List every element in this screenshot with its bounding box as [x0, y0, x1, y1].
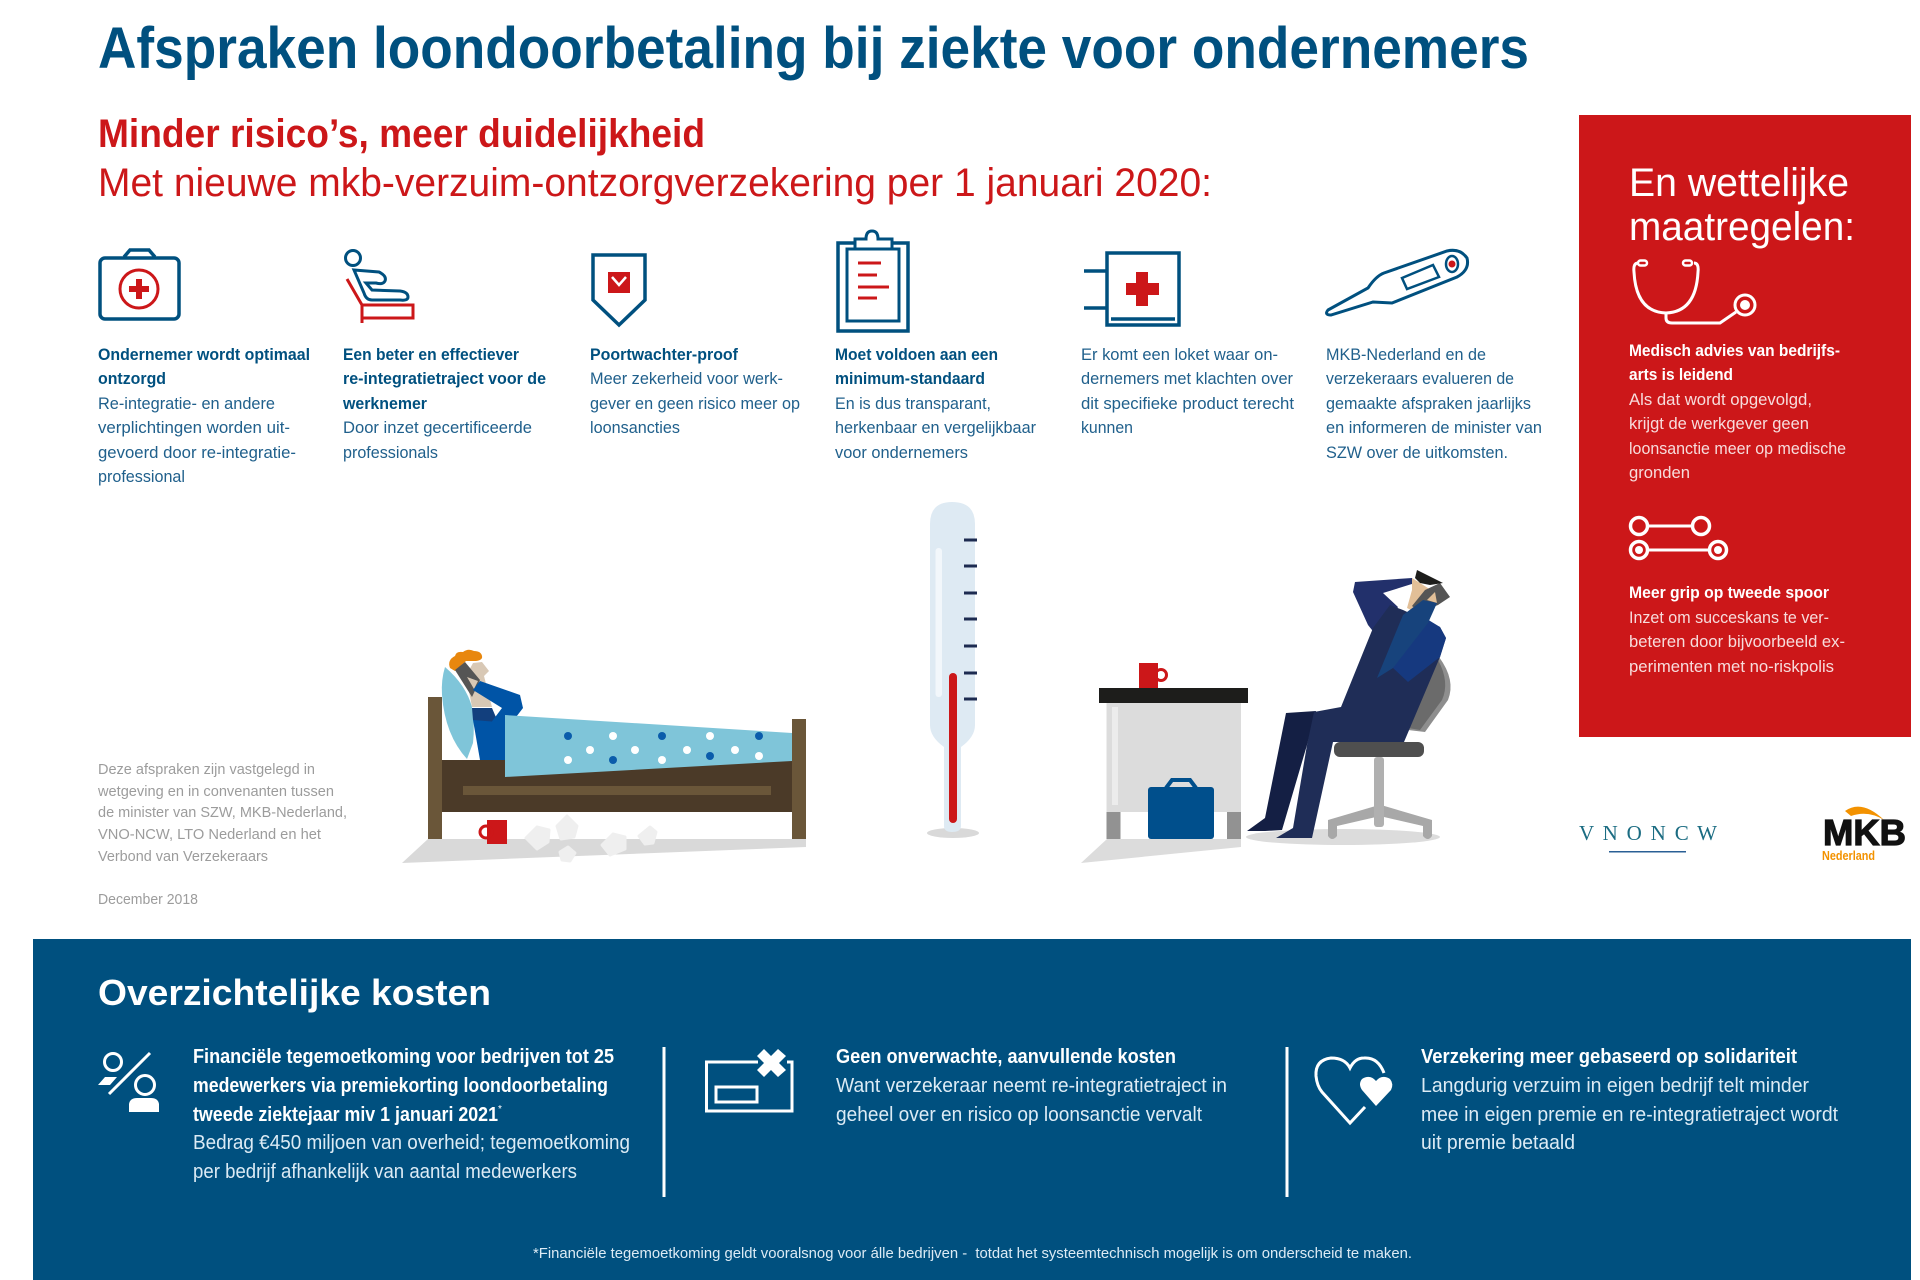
footnote: *Financiële tegemoetkoming geldt vooralsnog voor álle bedrijven - totdat het systeemtechnisch mogelijk is om onderscheid te maken. [533, 1245, 1412, 1262]
measure 2 text: Meer grip op tweede spoor [1629, 583, 1829, 602]
subtitle: Met nieuwe mkb-verzuim-ontzorgverzekering per 1 januari 2020: [98, 161, 1212, 205]
cost 2 text [836, 1046, 1227, 1126]
cost 2 text: Want verzekeraar neemt re-integratietraject in [836, 1075, 1227, 1097]
measure 2 text: beteren door bijvoorbeeld ex- [1629, 632, 1845, 651]
logo: MKB Nederland: Nederland [1822, 848, 1875, 863]
cost 1 text: Financiële tegemoetkoming voor bedrijven tot 25 [193, 1046, 614, 1068]
column 3 text: Poortwachter-proof [590, 345, 738, 364]
column 5 text: dernemers met klachten over [1081, 369, 1293, 388]
illustration: stressed man on chair [1246, 570, 1451, 845]
column 1 text: Ondernemer wordt optimaal [98, 345, 310, 364]
measure 2 text: perimenten met no-riskpolis [1629, 657, 1834, 676]
icon: stethoscope [1634, 260, 1755, 323]
column 5 text: dit specifieke product terecht [1081, 394, 1294, 413]
column 6 text: MKB-Nederland en de [1326, 345, 1486, 364]
column 3 text: loonsancties [590, 418, 680, 437]
icon: first aid case [100, 250, 179, 319]
cost 2 text: geheel over en risico op loonsanctie vervalt [836, 1104, 1202, 1126]
subtitle: Minder risico’s, meer duidelijkheid [98, 112, 705, 156]
column 2 text [342, 345, 546, 462]
column 1 text: ontzorgd [98, 369, 166, 388]
measure 2 text: Inzet om succeskans te ver- [1629, 608, 1829, 627]
column 2 text: re-integratietraject voor de [343, 369, 546, 388]
panel heading [1629, 161, 1855, 249]
column 6 text: en informeren de minister van [1326, 418, 1542, 437]
subtitle [98, 112, 1212, 205]
illustration: desk [1081, 663, 1248, 863]
column 5 text [1081, 345, 1294, 437]
column 6 text: verzekeraars evalueren de [1326, 369, 1514, 388]
column 4 text: herkenbaar en vergelijkbaar [835, 418, 1036, 437]
column 1 text: Re-integratie- en andere [98, 394, 275, 413]
column 6 text: gemaakte afspraken jaarlijks [1326, 394, 1531, 413]
footnote: source note: December 2018 [98, 891, 198, 908]
column 1 text [98, 345, 310, 486]
title: Afspraken loondoorbetaling bij ziekte voor ondernemers [98, 16, 1529, 81]
icon: percent with person [98, 1053, 159, 1112]
cost 1 text: medewerkers via premiekorting loondoorbetaling [193, 1075, 608, 1097]
logo: MKB Nederland: MKB [1823, 812, 1906, 853]
column 4 text [835, 345, 1036, 462]
footnote: source note: Deze afspraken zijn vastgelegd in [98, 761, 315, 778]
cost 3 text: Verzekering meer gebaseerd op solidariteit [1421, 1046, 1797, 1068]
measure 1 text: loonsanctie meer op medische [1629, 439, 1846, 458]
column 2 text: werknemer [342, 394, 427, 413]
measure 1 text: Als dat wordt opgevolgd, [1629, 390, 1812, 409]
panel heading: maatregelen: [1629, 205, 1855, 249]
cost 1 text: per bedrijf afhankelijk van aantal medewerkers [193, 1161, 577, 1183]
icon: shield [593, 255, 645, 325]
column 2 text: professionals [343, 443, 438, 462]
measure 1 text: arts is leidend [1629, 365, 1733, 384]
icon: person in chair [346, 250, 413, 323]
column 2 text: Een beter en effectiever [343, 345, 519, 364]
cost 3 text: Langdurig verzuim in eigen bedrijf telt minder [1421, 1075, 1809, 1097]
panel: costs [33, 939, 1911, 1280]
cost 3 text: uit premie betaald [1421, 1132, 1575, 1154]
column 4 text: minimum-standaard [835, 369, 985, 388]
logo: VNO NCW: V N O N C W [1579, 821, 1717, 845]
icon: card with cross [706, 1049, 792, 1111]
costs heading: Overzichtelijke kosten [98, 972, 491, 1013]
measure 2 text [1629, 583, 1845, 676]
panel: legal measures [1579, 115, 1911, 737]
cost 1 text [193, 1046, 630, 1183]
column 6 text: SZW over de uitkomsten. [1326, 443, 1508, 462]
icon: help desk sign [1084, 253, 1179, 325]
illustration: sick person in bed [402, 650, 806, 863]
footnote: source note: de minister van SZW, MKB-Nederland, [98, 804, 347, 821]
icon: digital thermometer [1327, 250, 1468, 315]
footnote: source note: VNO-NCW, LTO Nederland en het [98, 826, 322, 843]
cost 1 text: * [498, 1104, 502, 1115]
cost 3 text: mee in eigen premie en re-integratietraject wordt [1421, 1104, 1838, 1126]
measure 1 text: gronden [1629, 463, 1690, 482]
column 1 text: verplichtingen worden uit- [98, 418, 290, 437]
cost 1 text: Bedrag €450 miljoen van overheid; tegemoetkoming [193, 1132, 630, 1154]
column 4 text: Moet voldoen aan een [835, 345, 998, 364]
panel heading: En wettelijke [1629, 161, 1849, 205]
icon: clipboard [838, 231, 908, 331]
column 5 text: Er komt een loket waar on- [1081, 345, 1278, 364]
column 1 text: professional [98, 467, 185, 486]
illustration: thermometer [927, 502, 979, 838]
measure 1 text: Medisch advies van bedrijfs- [1629, 341, 1840, 360]
icon: two hearts [1316, 1058, 1392, 1123]
column 3 text: Meer zekerheid voor werk- [590, 369, 783, 388]
column 4 text: voor ondernemers [835, 443, 968, 462]
measure 1 text: krijgt de werkgever geen [1629, 414, 1809, 433]
column 3 text: gever en geen risico meer op [590, 394, 800, 413]
column 5 text: kunnen [1081, 418, 1133, 437]
footnote: source note [97, 761, 347, 908]
column 1 text: gevoerd door re-integratie- [98, 443, 296, 462]
column 2 text: Door inzet gecertificeerde [343, 418, 532, 437]
footnote: source note: Verbond van Verzekeraars [98, 848, 268, 865]
cost 1 text: tweede ziektejaar miv 1 januari 2021 [193, 1104, 498, 1126]
cost 2 text: Geen onverwachte, aanvullende kosten [836, 1046, 1176, 1068]
icon: two tracks [1630, 518, 1726, 558]
column 3 text [590, 345, 800, 437]
footnote: source note: wetgeving en in convenanten tussen [97, 783, 334, 800]
cost 3 text [1421, 1046, 1838, 1154]
measure 1 text [1629, 341, 1846, 482]
column 4 text: En is dus transparant, [835, 394, 991, 413]
column 6 text [1326, 345, 1542, 462]
